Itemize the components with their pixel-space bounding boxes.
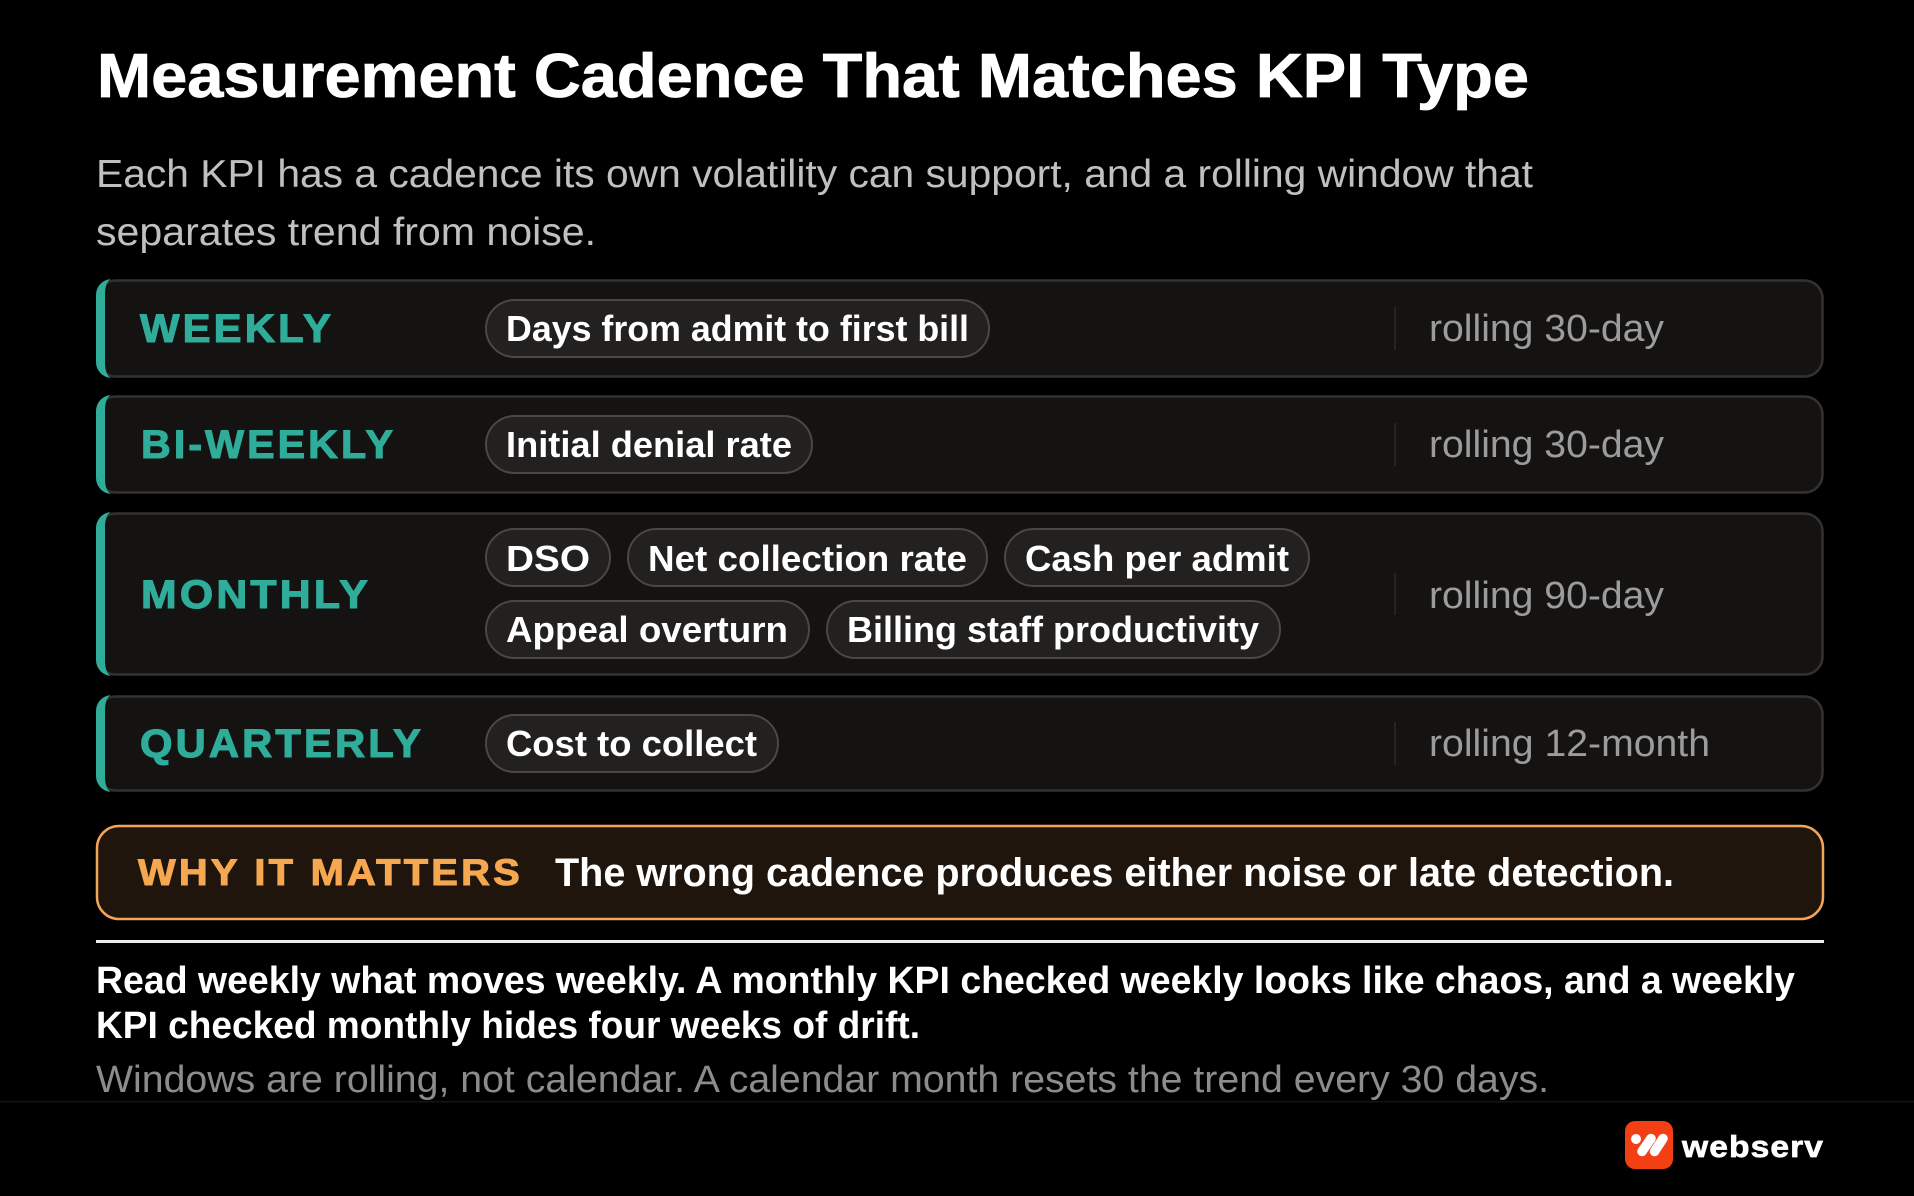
callout text: The wrong cadence produces either noise or late detection.	[555, 851, 1674, 895]
panel: monthly row	[96, 512, 1822, 676]
subtitle: separates trend from noise.	[96, 211, 596, 254]
pill: cash per admit	[1005, 529, 1309, 586]
pill: initial denial rate	[486, 416, 812, 473]
callout: why it matters	[97, 826, 1823, 919]
pill: billing staff productivity	[827, 601, 1280, 658]
pill: net collection rate: Net collection rate	[648, 538, 967, 579]
pill: cost to collect: Cost to collect	[506, 723, 757, 764]
label: weekly: WEEKLY	[140, 307, 334, 351]
pill: billing staff productivity: Billing staff productivity	[847, 609, 1260, 650]
label: bi-weekly: BI-WEEKLY	[141, 423, 396, 467]
panel: quarterly row	[96, 695, 1822, 792]
pill: cost to collect	[486, 715, 778, 772]
callout label: WHY IT MATTERS	[138, 852, 523, 893]
logo: webserv	[1625, 1121, 1824, 1169]
takeaway text: KPI checked monthly hides four weeks of drift.	[96, 1005, 920, 1047]
panel: bi-weekly row	[96, 395, 1822, 494]
pill: days from admit to first bill: Days from admit to first bill	[506, 308, 969, 349]
footnote: Windows are rolling, not calendar. A calendar month resets the trend every 30 days.	[96, 1059, 1549, 1101]
pill: DSO: DSO	[506, 538, 590, 579]
window: rolling 90-day: rolling 90-day	[1429, 575, 1664, 617]
title: Measurement Cadence That Matches KPI Type	[97, 42, 1529, 111]
pill: days from admit to first bill	[486, 300, 989, 357]
icon: webserv mark	[1625, 1121, 1673, 1169]
window: rolling 12-month: rolling 12-month	[1429, 723, 1710, 765]
label: quarterly: QUARTERLY	[140, 722, 424, 766]
pill: net collection rate	[628, 529, 987, 586]
window: rolling 30-day: rolling 30-day	[1429, 424, 1664, 466]
pill: cash per admit: Cash per admit	[1025, 538, 1289, 579]
pill: appeal overturn	[486, 601, 809, 658]
subtitle	[96, 153, 1533, 254]
pill: appeal overturn: Appeal overturn	[506, 609, 788, 650]
takeaway text: Read weekly what moves weekly. A monthly KPI checked weekly looks like chaos, and a weekly	[96, 960, 1795, 1002]
label: monthly: MONTHLY	[141, 573, 371, 617]
subtitle: Each KPI has a cadence its own volatility can support, and a rolling window that	[96, 153, 1533, 196]
panel: weekly row	[96, 279, 1822, 378]
pill: initial denial rate: Initial denial rate	[506, 424, 792, 465]
pill: DSO	[486, 529, 610, 586]
window: rolling 30-day: rolling 30-day	[1429, 308, 1664, 350]
wordmark: webserv	[1681, 1129, 1824, 1164]
takeaway text	[96, 960, 1795, 1047]
